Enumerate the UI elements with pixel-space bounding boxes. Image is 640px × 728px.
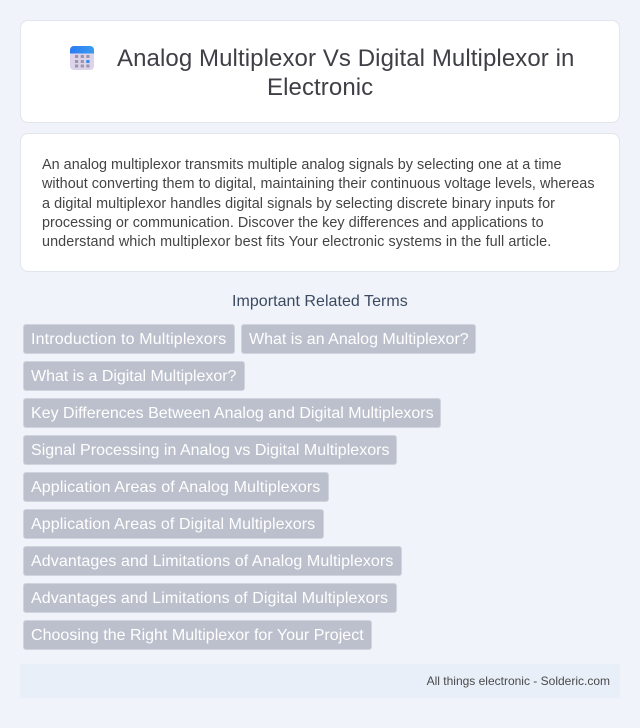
tag: digital applications [23, 509, 324, 539]
intro text panel [20, 133, 620, 272]
tag: digital multiplexor: What is a Digital Multiplexor? [31, 368, 236, 385]
tag: analog multiplexor: What is an Analog Multiplexor? [249, 331, 469, 348]
tag: digital multiplexor [23, 361, 245, 391]
title: Electronic [267, 74, 373, 101]
intro paragraph: understand which multiplexor best fits Your electronic systems in the full article. [42, 234, 551, 250]
tag: analog advantages [23, 546, 402, 576]
intro paragraph: without converting them to digital, maintaining their continuous voltage levels, whereas [42, 176, 595, 192]
intro paragraph [42, 157, 595, 250]
tag: analog multiplexor [241, 324, 476, 354]
tag: digital advantages: Advantages and Limitations of Digital Multiplexors [31, 590, 388, 607]
tag: signal processing [23, 435, 397, 465]
intro paragraph: An analog multiplexor transmits multiple analog signals by selecting one at a time [42, 157, 562, 173]
related terms tag list [23, 324, 476, 650]
intro paragraph: processing or communication. Discover the key differences and applications to [42, 215, 544, 231]
tag: choosing [23, 620, 372, 650]
tag: digital advantages [23, 583, 397, 613]
tag: choosing: Choosing the Right Multiplexor for Your Project [31, 627, 364, 644]
section heading: Important Related Terms [232, 293, 408, 310]
tag: signal processing: Signal Processing in Analog vs Digital Multiplexors [31, 442, 390, 459]
tag: introduction: Introduction to Multiplexors [31, 331, 226, 348]
footer text: All things electronic - Solderic.com [427, 674, 610, 688]
footer bar [20, 664, 620, 698]
tag: introduction [23, 324, 235, 354]
title [117, 45, 574, 101]
tag: key differences: Key Differences Between Analog and Digital Multiplexors [31, 405, 434, 422]
header panel [20, 20, 620, 123]
icon: calendar grid [70, 46, 94, 70]
title: Analog Multiplexor Vs Digital Multiplexor in [117, 45, 574, 72]
tag: analog applications: Application Areas of Analog Multiplexors [31, 479, 320, 496]
tag: analog applications [23, 472, 329, 502]
intro paragraph: a digital multiplexor handles digital signals by selecting discrete binary inputs for [42, 196, 555, 212]
tag: analog advantages: Advantages and Limitations of Analog Multiplexors [31, 553, 393, 570]
tag: key differences [23, 398, 441, 428]
tag: digital applications: Application Areas of Digital Multiplexors [31, 516, 315, 533]
